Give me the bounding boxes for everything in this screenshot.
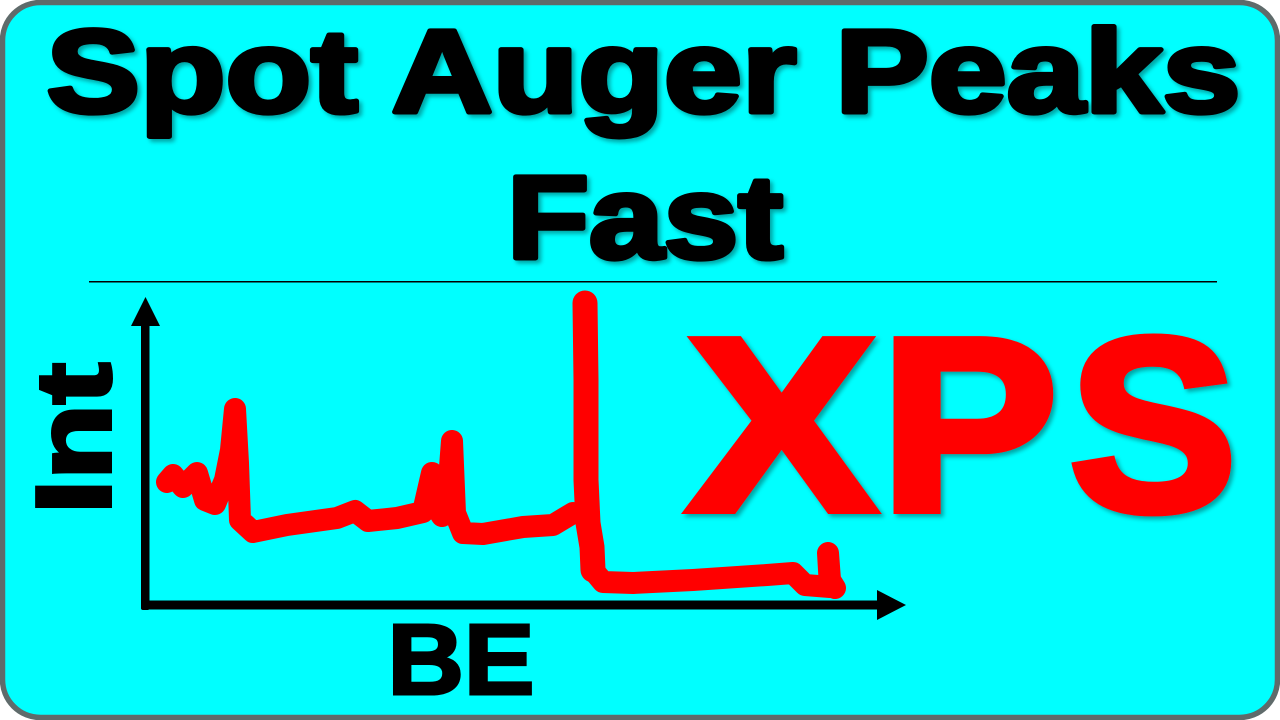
- x axis arrow: [141, 590, 906, 620]
- x axis label: BE: BE: [388, 604, 534, 716]
- XPS label: X: [687, 287, 876, 563]
- divider line: [89, 281, 1217, 282]
- y axis arrow: [131, 297, 160, 610]
- y axis label: Int: Int: [15, 363, 133, 514]
- title line 2: Fast: [507, 152, 783, 284]
- XPS label: P: [880, 287, 1058, 563]
- title line 1: Spot Auger Peaks: [46, 6, 1240, 138]
- XPS label: S: [1069, 287, 1237, 563]
- spectrum curve: [167, 303, 835, 588]
- XPS label: [687, 287, 1237, 563]
